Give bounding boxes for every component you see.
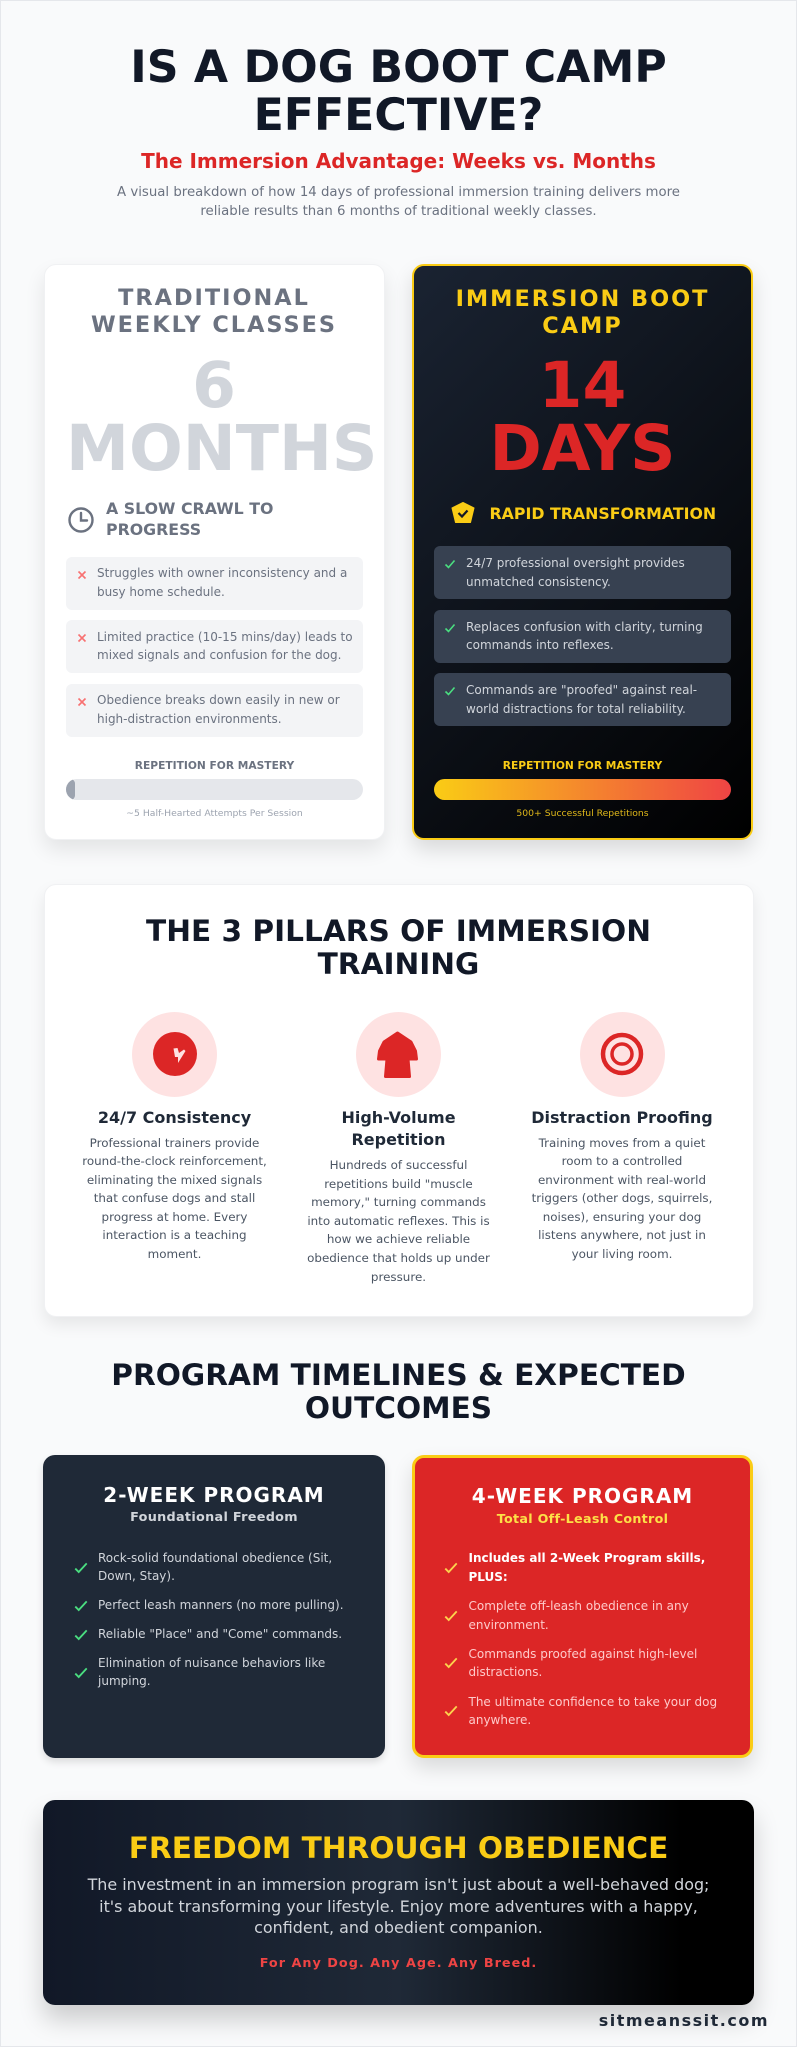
intro text: A visual breakdown of how 14 days of professional immersion training delivers more <box>117 185 680 200</box>
benefit item 1 <box>434 546 731 599</box>
pillar text: triggers (other dogs, squirrels, <box>532 1191 712 1205</box>
heading: program timelines: OUTCOMES <box>305 1391 492 1425</box>
heading: immersion boot camp: IMMERSION BOOT <box>456 286 709 312</box>
callout text: it's about transforming your lifestyle. Enjoy more adventures with a happy, <box>99 1896 698 1916</box>
pillar text: room to a controlled <box>562 1154 682 1168</box>
benefit item 2: Replaces confusion with clarity, turning <box>466 620 703 634</box>
pillar title <box>341 1108 456 1149</box>
item 2 text: Complete off-leash obedience in any <box>468 1599 689 1613</box>
pillar text: how we achieve reliable <box>327 1232 470 1246</box>
subheading: slow crawl: PROGRESS <box>106 520 201 538</box>
heading: traditional: WEEKLY CLASSES <box>91 312 337 338</box>
pillar text: repetitions build "muscle <box>324 1177 473 1191</box>
caption: immersion repetitions: 500+ Successful Repetitions <box>516 808 649 818</box>
benefit item 3 <box>434 673 731 726</box>
program list <box>444 1551 717 1727</box>
pillar text: your living room. <box>572 1247 672 1261</box>
callout text: The investment in an immersion program isn't just about a well-behaved dog; <box>88 1875 709 1894</box>
list: drawbacks <box>66 557 363 737</box>
benefit item 2 <box>434 610 731 662</box>
check item 4 <box>444 1706 458 1716</box>
heading: program timelines: PROGRAM TIMELINES & EXPECTED <box>111 1358 686 1392</box>
pillar text: obedience that holds up under <box>307 1251 490 1265</box>
item 1 text <box>98 1550 332 1583</box>
item 3 text: Commands proofed against high-level <box>468 1646 697 1660</box>
pillar title: High-Volume <box>341 1108 456 1127</box>
label: repetition, traditional: REPETITION FOR MASTERY <box>135 759 294 772</box>
program subtitle: Total Off-Leash Control <box>497 1510 668 1526</box>
drawback item 3: high-distraction environments. <box>97 712 282 726</box>
check item 3 <box>74 1630 88 1640</box>
icon: bolt in circle <box>132 1012 217 1097</box>
benefit item 2: commands into reflexes. <box>466 638 614 652</box>
program list <box>74 1550 344 1688</box>
heading: traditional: TRADITIONAL <box>118 285 310 311</box>
item 1 text: PLUS: <box>468 1570 508 1584</box>
pillar text: environment with real-world <box>538 1173 706 1187</box>
check item 2 <box>444 1610 458 1622</box>
callout text <box>88 1875 709 1937</box>
pillar text: pressure. <box>371 1270 426 1284</box>
caption: traditional repetitions: ~5 Half-Hearted Attempts Per Session <box>126 808 303 818</box>
pillar: distraction proofing <box>531 1012 713 1261</box>
pillar text: that confuse dogs and stall <box>94 1191 255 1205</box>
big stat: 14 days: DAYS <box>489 412 676 485</box>
progress bar: immersion <box>434 779 731 800</box>
item 4 text: anywhere. <box>468 1713 531 1727</box>
drawback item 3: Obedience breaks down easily in new or <box>97 693 340 707</box>
drawback item 2: mixed signals and confusion for the dog. <box>97 648 341 662</box>
item 1 text: Includes all 2-Week Program skills, <box>468 1551 705 1565</box>
check item 4 <box>74 1668 88 1678</box>
pillar: consistency <box>82 1012 267 1261</box>
title: EFFECTIVE? <box>254 90 543 141</box>
pillar text <box>307 1158 490 1284</box>
check item 1 <box>74 1562 88 1574</box>
check item 3 <box>444 1658 458 1668</box>
panel: 2-week program <box>43 1455 385 1758</box>
item 1 text: Rock-solid foundational obedience (Sit, <box>98 1550 332 1564</box>
drawback item 1: busy home schedule. <box>97 585 225 599</box>
program title: 2-WEEK PROGRAM <box>103 1483 325 1507</box>
pillar text: interaction is a teaching <box>102 1228 247 1242</box>
item 4 text <box>468 1694 717 1727</box>
pillar text: Training moves from a quiet <box>539 1136 705 1150</box>
intro text: reliable results than 6 months of traditional weekly classes. <box>200 204 597 219</box>
check item 2 <box>74 1600 88 1612</box>
check item 1 <box>444 1562 458 1574</box>
item 3 text <box>468 1646 697 1679</box>
big stat: 14 days: 14 <box>539 349 626 422</box>
pillar text: listens anywhere, not just in <box>538 1228 706 1242</box>
heading: immersion boot camp <box>456 286 709 338</box>
subheading: slow crawl <box>106 498 273 538</box>
heading: immersion boot camp: CAMP <box>542 312 623 338</box>
pillar text: Hundreds of successful <box>330 1158 467 1172</box>
benefit item 3: world distractions for total reliability. <box>466 702 686 716</box>
panel: immersion boot camp <box>412 264 753 840</box>
subheading: rapid transformation: RAPID TRANSFORMATION <box>490 504 716 523</box>
pillar text <box>532 1136 712 1261</box>
panel: traditional weekly classes <box>44 264 385 840</box>
pillar text: round-the-clock reinforcement, <box>82 1154 267 1168</box>
intro text <box>117 185 680 219</box>
icon: target <box>580 1012 664 1097</box>
tagline: For Any Dog. Any Age. Any Breed. <box>260 1956 537 1971</box>
heading: traditional <box>91 285 337 338</box>
pillar text: eliminating the mixed signals <box>87 1173 262 1187</box>
heading: three pillars: THE 3 PILLARS OF IMMERSION <box>146 914 651 948</box>
item 4 text <box>98 1656 325 1688</box>
heading: program timelines <box>111 1358 686 1425</box>
subheading: slow crawl: A SLOW CRAWL TO <box>106 498 273 518</box>
callout heading: FREEDOM THROUGH OBEDIENCE <box>129 1831 668 1865</box>
drawback item 3 <box>66 684 363 736</box>
panel: 4-week program <box>412 1455 753 1758</box>
item 4 text: jumping. <box>98 1674 151 1688</box>
heading: three pillars: TRAINING <box>318 947 479 981</box>
big stat: months: MONTHS <box>66 410 378 484</box>
progress bar: traditional <box>66 779 363 800</box>
item 2 text: Perfect leash manners (no more pulling). <box>98 1598 344 1612</box>
heading: three pillars <box>146 914 651 981</box>
pillar: repetition <box>307 1012 490 1284</box>
pillar text: into automatic reflexes. This is <box>307 1214 490 1228</box>
benefit item 1: 24/7 professional oversight provides <box>466 556 685 570</box>
panel: three pillars <box>44 884 754 1317</box>
pillar text <box>82 1136 267 1261</box>
pillar title: 24/7 Consistency <box>98 1108 251 1127</box>
pillar title: Repetition <box>351 1130 446 1149</box>
item 3 text: Reliable "Place" and "Come" commands. <box>98 1626 342 1640</box>
pillar text: progress at home. Every <box>102 1210 247 1224</box>
icon: up arrow <box>356 1012 441 1097</box>
icon: clock <box>68 507 94 533</box>
program title: 4-WEEK PROGRAM <box>472 1484 693 1508</box>
callout text: confident, and obedient companion. <box>254 1918 543 1937</box>
pillar text: noises), ensuring your dog <box>543 1210 701 1224</box>
item 1 text <box>468 1551 705 1584</box>
big stat: 14 days <box>489 349 676 485</box>
title <box>130 42 667 141</box>
big stat: 6: 6 <box>192 348 236 422</box>
item 3 text: distractions. <box>468 1665 542 1679</box>
program subtitle: Foundational Freedom <box>130 1510 298 1524</box>
pillar text: moment. <box>148 1247 201 1261</box>
label: repetition, immersion: REPETITION FOR MASTERY <box>503 759 662 772</box>
drawback item 2: Limited practice (10-15 mins/day) leads to <box>97 630 353 644</box>
panel: freedom through obedience <box>43 1800 754 2005</box>
pillar text: Professional trainers provide <box>90 1136 259 1150</box>
item 2 text: environment. <box>468 1618 549 1632</box>
item 4 text: Elimination of nuisance behaviors like <box>98 1656 325 1670</box>
drawback item 1: Struggles with owner inconsistency and a <box>97 566 347 580</box>
item 4 text: The ultimate confidence to take your dog <box>468 1694 717 1708</box>
item 1 text: Down, Stay). <box>98 1569 175 1583</box>
pillar text: memory," turning commands <box>311 1195 486 1209</box>
icon: shield check <box>452 502 474 523</box>
list: benefits <box>434 546 731 726</box>
drawback item 2 <box>66 620 363 673</box>
benefit item 1: unmatched consistency. <box>466 575 611 589</box>
pillar title: Distraction Proofing <box>531 1108 713 1127</box>
title: IS A DOG BOOT CAMP <box>130 42 667 93</box>
benefit item 3: Commands are "proofed" against real- <box>466 683 697 697</box>
item 2 text <box>468 1599 689 1632</box>
website credit: sitmeanssit.com <box>599 2011 769 2030</box>
subtitle: The Immersion Advantage: Weeks vs. Months <box>141 148 656 172</box>
drawback item 1 <box>66 556 363 610</box>
